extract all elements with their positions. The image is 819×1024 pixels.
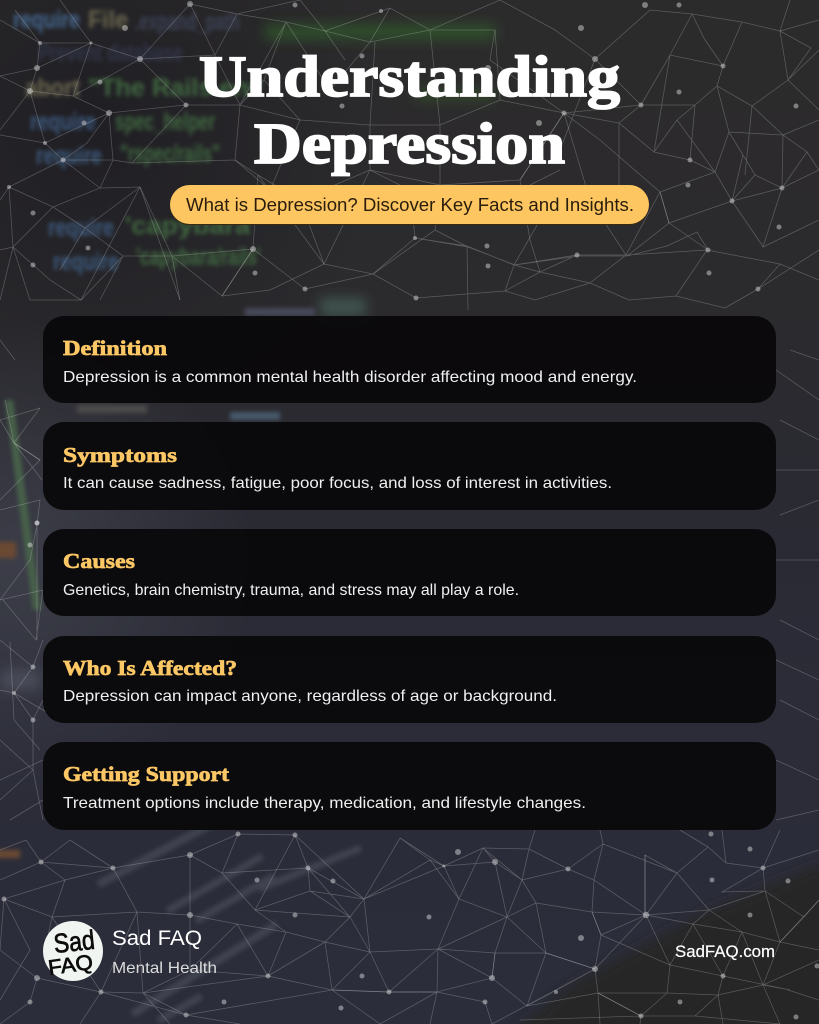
panel: who is affected: Who Is Affected? (63, 656, 237, 680)
blurred code backdrop: File (88, 6, 128, 34)
panel: definition (43, 316, 776, 403)
icon: sad faq logo (43, 921, 103, 981)
brand tagline: Mental Health (112, 960, 217, 977)
blurred code backdrop: require (30, 108, 96, 136)
panel: who is affected (43, 636, 776, 723)
blurred glows (0, 24, 495, 1024)
icon: sad faq logo: Sad (52, 925, 96, 959)
panel: causes: Causes (63, 549, 135, 573)
panel: getting support: Treatment options include therapy, medication, and lifestyle changes. (63, 795, 586, 812)
blurred code backdrop: spec_helper (115, 108, 215, 136)
blurred code backdrop: "rspec/rails" (120, 140, 220, 168)
blurred code backdrop: require (13, 6, 80, 34)
panel: causes: Genetics, brain chemistry, trauma, and stress may all play a role. (63, 582, 519, 599)
panel: symptoms: It can cause sadness, fatigue, poor focus, and loss of interest in activities. (63, 475, 612, 492)
blurred code backdrop (13, 6, 263, 276)
blurred code backdrop: 'capybara (125, 212, 251, 240)
panel: getting support (43, 742, 776, 830)
blurred code backdrop: require (53, 248, 119, 276)
blurred code backdrop: Prevent database (38, 39, 183, 67)
blurred code backdrop: .expand_path (135, 8, 240, 36)
panel: definition: Depression is a common mental health disorder affecting mood and energy. (63, 369, 637, 386)
title: Understanding (199, 44, 620, 109)
title (199, 44, 620, 176)
blurred code backdrop: abort (25, 74, 81, 102)
blurred code backdrop: require (48, 214, 114, 242)
blurred code backdrop: "The Rails env (88, 74, 263, 102)
brand name: Sad FAQ (112, 927, 202, 950)
panel: symptoms: Symptoms (63, 443, 177, 467)
panel: causes (43, 529, 776, 616)
panel: definition: Definition (63, 336, 167, 360)
icon: sad faq logo: FAQ (47, 951, 94, 980)
panel: symptoms (43, 422, 776, 510)
title: Depression (254, 111, 565, 176)
blurred code backdrop: require (36, 142, 102, 170)
panel: who is affected: Depression can impact anyone, regardless of age or background. (63, 688, 557, 705)
website: SadFAQ.com (675, 943, 775, 961)
subtitle pill: What is Depression? Discover Key Facts and Insights. (186, 195, 634, 215)
subtitle pill (170, 185, 649, 225)
panel: getting support: Getting Support (63, 762, 229, 786)
blurred code backdrop: 'capybara/rails' (136, 243, 261, 271)
